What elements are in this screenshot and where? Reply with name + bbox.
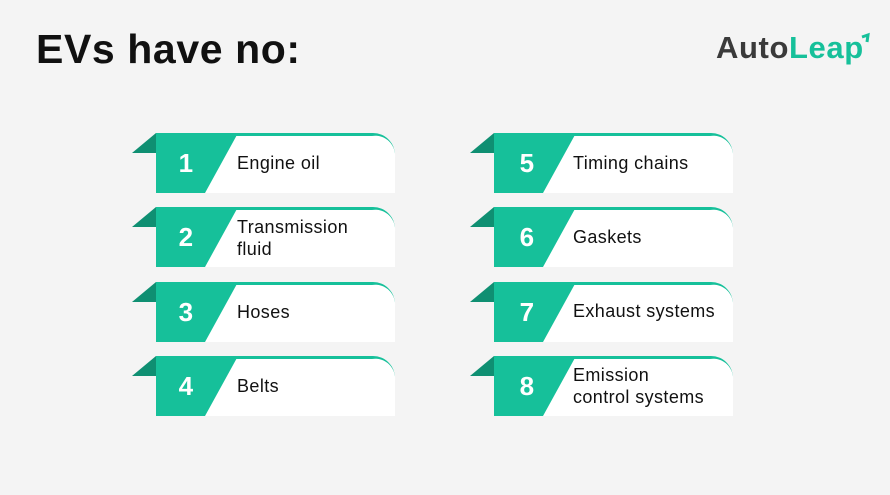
card 3: Hoses [237, 302, 290, 322]
card 5: 5 [520, 148, 534, 178]
title: EVs have no: [36, 26, 301, 72]
card 2: Transmission [237, 217, 348, 237]
card 6 [470, 207, 733, 267]
card 4: 4 [179, 371, 194, 401]
card 1 [132, 133, 395, 193]
card 7: Exhaust systems [573, 301, 715, 321]
card 6: Gaskets [573, 227, 642, 247]
card 8: Emission [573, 365, 649, 385]
card 4 [132, 356, 395, 416]
card 7 [470, 282, 733, 342]
card 1: Engine oil [237, 153, 320, 173]
card 5 [470, 133, 733, 193]
card 7: 7 [520, 297, 534, 327]
card 8: control systems [573, 387, 704, 407]
card 4: Belts [237, 376, 279, 396]
card 2: fluid [237, 239, 272, 259]
card 2 [132, 207, 395, 267]
card 3 [132, 282, 395, 342]
card 3: 3 [179, 297, 193, 327]
card 5: Timing chains [573, 153, 689, 173]
card 2: 2 [179, 222, 193, 252]
card 8: 8 [520, 371, 534, 401]
card 6: 6 [520, 222, 534, 252]
card 1: 1 [179, 148, 193, 178]
card 8 [470, 356, 733, 416]
logo: AutoLeap [716, 30, 864, 65]
